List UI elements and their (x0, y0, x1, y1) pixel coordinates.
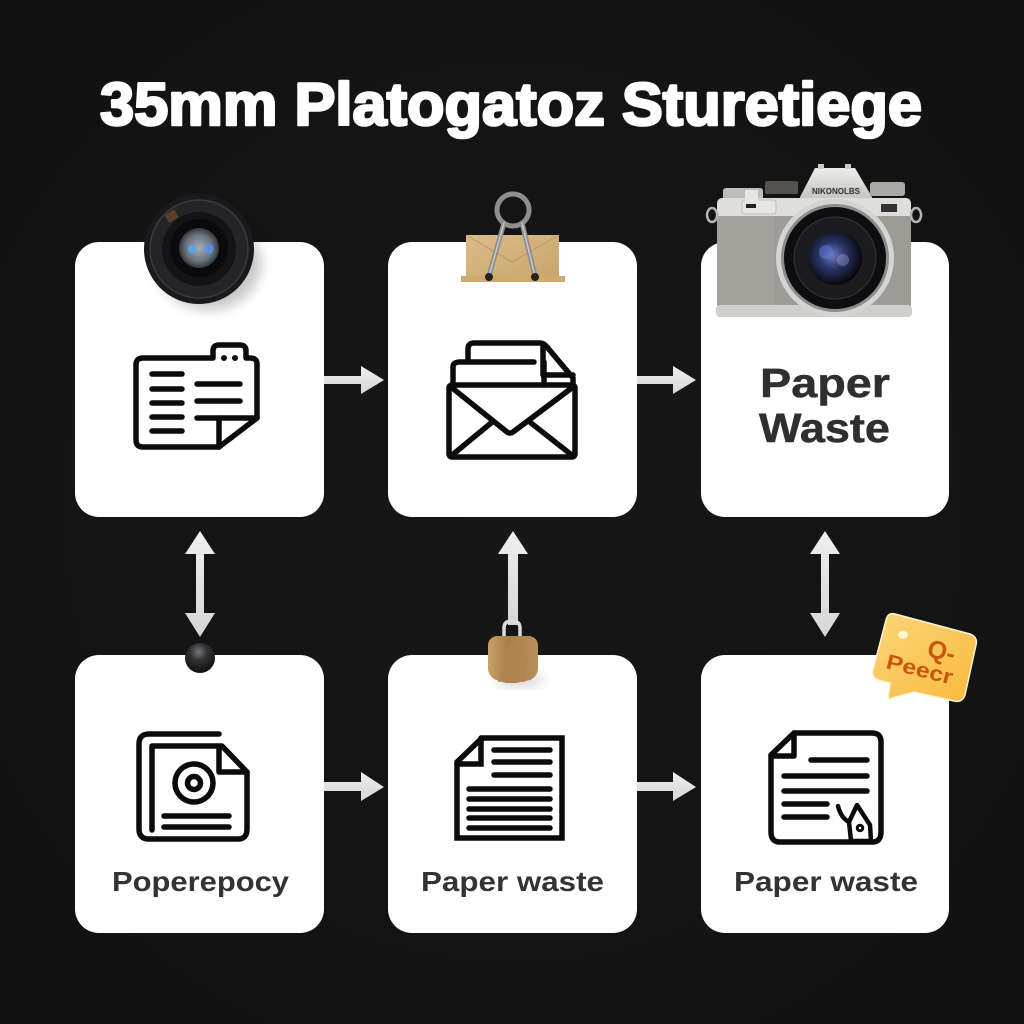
icon: yellow speech sticker: Peecr (884, 651, 955, 689)
label: poperepocy: Poperepocy (112, 866, 289, 897)
label: paper waste: Paper (760, 360, 890, 406)
icon: document with pen (771, 733, 881, 842)
arrow: double vertical left (185, 531, 215, 637)
arrow: double vertical right (810, 531, 840, 637)
label: paper waste (759, 360, 890, 451)
icon: silver camera: NIKONOLBS (812, 187, 861, 196)
title: 35mm Platogatoz Sturetiege (100, 71, 922, 138)
panel: top middle card (388, 242, 637, 517)
icon: envelope with papers (449, 343, 575, 457)
panel: bottom middle card (388, 655, 637, 933)
panel: bottom right card (701, 655, 949, 933)
icon: text document (457, 738, 562, 838)
panel: top left card (75, 242, 324, 517)
panel: top right card (701, 242, 949, 517)
label: paper waste: Paper waste (421, 866, 604, 897)
icon: document with disc (139, 734, 247, 839)
arrow: vertical middle up (498, 531, 528, 625)
icon: wooden padlock (488, 621, 544, 686)
icon: silver camera (707, 164, 921, 317)
icon: camera lens (144, 194, 261, 310)
arrow: bottom middle to bottom right (637, 772, 696, 801)
icon: yellow speech sticker: Q- (925, 635, 958, 669)
panel: bottom left card (75, 655, 324, 933)
icon: black ball pin (185, 643, 215, 673)
icon: document with tab (136, 345, 257, 447)
arrow: top middle to top right (637, 366, 696, 394)
icon: binder clip (461, 194, 565, 282)
label: paper waste: Paper waste (734, 866, 918, 897)
arrow: bottom left to bottom middle (324, 772, 384, 801)
icon: yellow speech sticker (873, 614, 976, 701)
label: paper waste: Waste (759, 405, 890, 451)
arrow: top left to top middle (324, 366, 384, 394)
